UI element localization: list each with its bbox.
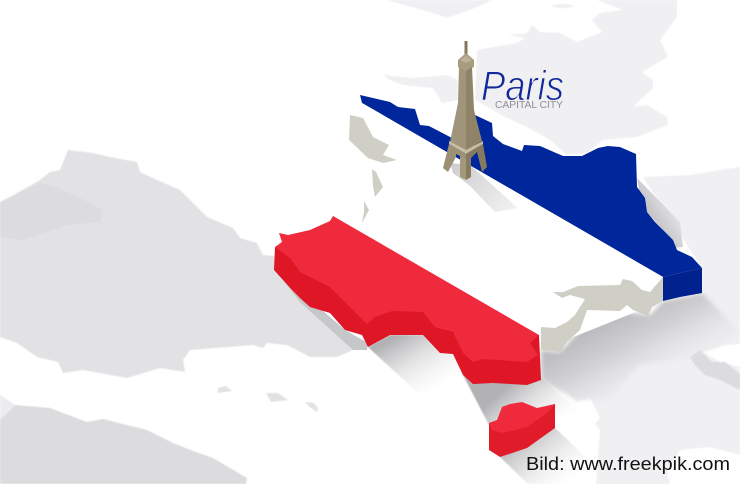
France: Corsica (489, 402, 555, 457)
France: white band (333, 100, 663, 350)
shadow: western coast (274, 268, 368, 350)
France: blue band top face (360, 95, 702, 277)
subheading: capital city: CAPITAL CITY (495, 100, 563, 111)
image credit: Bild: www.freekpik.com (526, 453, 730, 474)
France: red band side face (274, 247, 541, 385)
shadow: southern border (541, 293, 740, 400)
France: blue band side face (663, 268, 702, 301)
map: Spain and Portugal land (0, 150, 353, 378)
shadow: south-eastern coast (463, 375, 590, 425)
icon: Eiffel Tower (443, 41, 487, 180)
shadow: eastern border (637, 178, 683, 248)
heading: Paris: Paris (481, 62, 564, 109)
map: northern Europe land (383, 0, 677, 155)
France: west coast beige land (349, 115, 397, 223)
map: eastern and southern Europe land (560, 167, 740, 484)
shadow: Mediterranean coast (368, 335, 470, 392)
shadow: Corsica (500, 428, 605, 484)
France: red band top face (275, 216, 539, 362)
shadow: Eiffel Tower (450, 163, 518, 212)
map: North Africa land (0, 395, 247, 484)
France: southern border beige land (541, 277, 663, 352)
map: Balearic islands (218, 386, 318, 412)
